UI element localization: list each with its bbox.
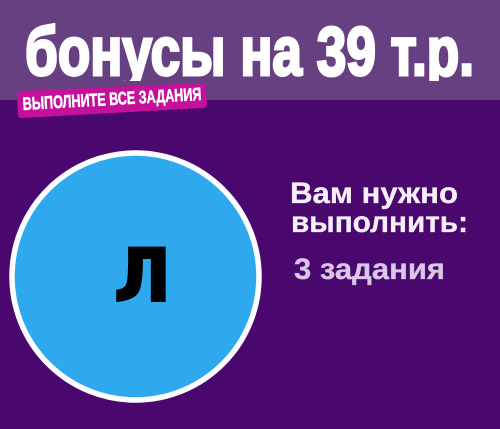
instruction text [290,177,468,239]
avatar circle [12,153,259,400]
header band [0,0,500,100]
tag text: ВЫПОЛНИТЕ ВСЕ ЗАДАНИЯ [22,84,202,114]
line two: выполнить: [291,206,468,239]
line one: Вам нужно [290,177,458,210]
circle [12,153,259,400]
avatar letter: Л [114,234,171,319]
task count: 3 задания [294,253,445,286]
tag background [17,83,207,118]
pink tag [17,83,207,118]
